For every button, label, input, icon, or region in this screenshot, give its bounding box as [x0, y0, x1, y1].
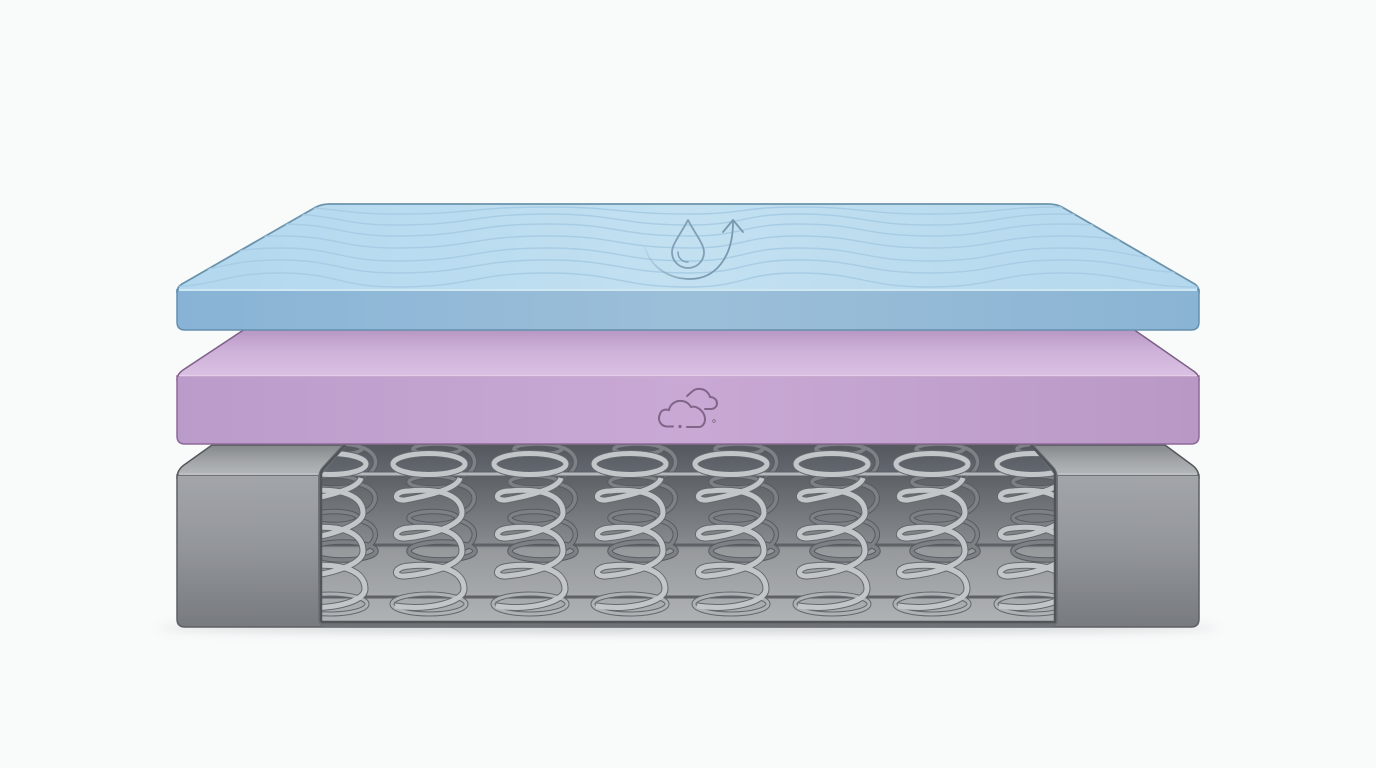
rear coils: [310, 444, 1079, 560]
foam front surface: [177, 376, 1199, 444]
base front surface: [177, 475, 1199, 627]
foam top surface: [177, 329, 1199, 380]
cutaway frame: [318, 445, 1058, 627]
top rail: [320, 472, 1056, 476]
layer: gray spring base: [177, 444, 1199, 627]
blue front surface: [177, 290, 1199, 330]
icon: clouds: [659, 389, 717, 427]
rear rails: [320, 545, 1056, 597]
foam top highlight: [179, 375, 1197, 376]
front coils: [293, 454, 1070, 614]
cutaway spring window: [293, 444, 1079, 627]
wave lines: [160, 207, 1200, 287]
cutaway outline: [321, 445, 1055, 622]
layer: purple comfort foam: [177, 329, 1199, 444]
cutaway interior: [293, 444, 1079, 624]
icon: moisture drop with wicking arrow: [645, 220, 743, 279]
layer: blue cooling foam: [160, 204, 1200, 330]
blue top surface: [177, 204, 1199, 292]
base top surface: [177, 445, 1199, 478]
ground shadow: [158, 623, 1218, 633]
base top highlight: [179, 473, 1197, 475]
blue top highlight: [179, 289, 1197, 291]
